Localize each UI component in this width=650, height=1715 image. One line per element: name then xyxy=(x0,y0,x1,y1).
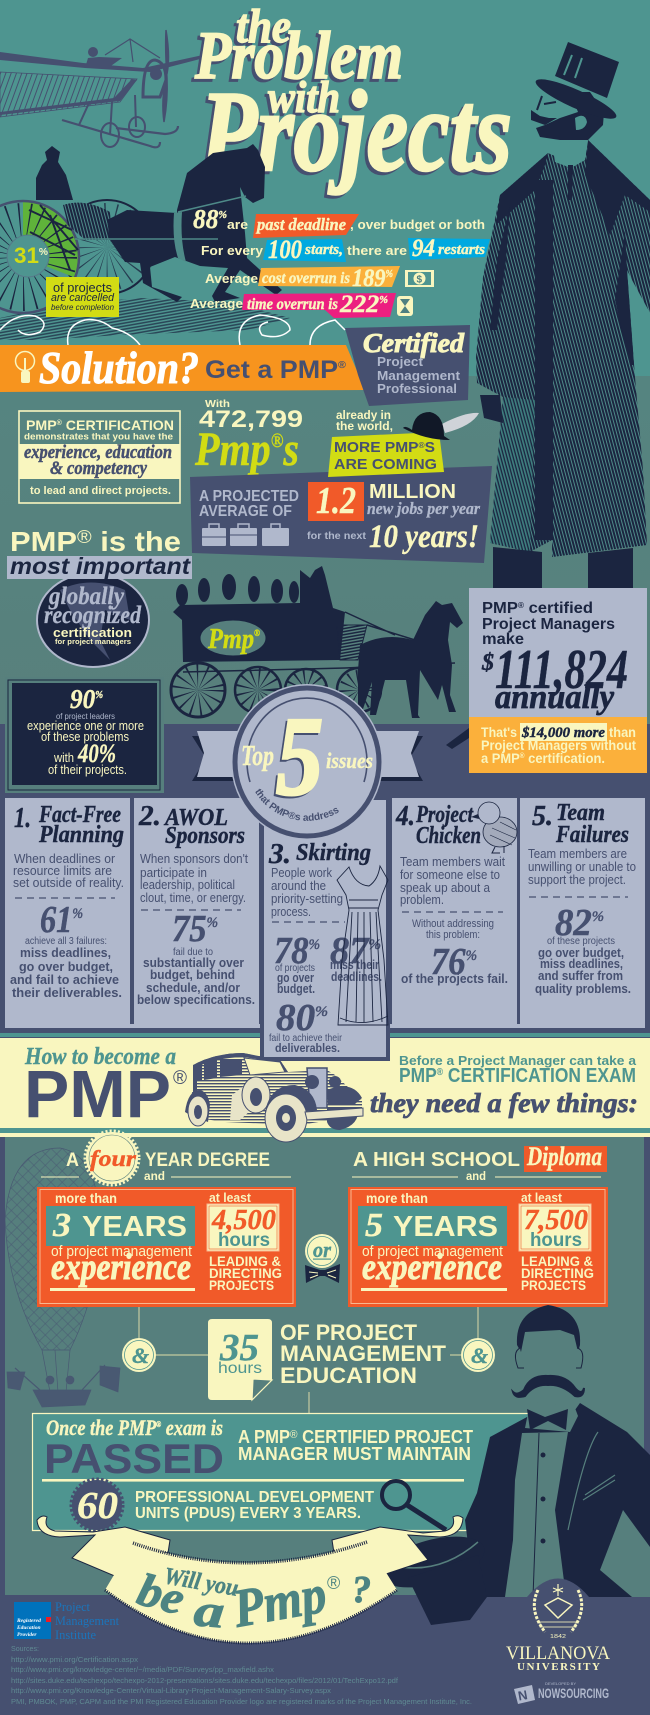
panel: issue 5 team failures: % xyxy=(592,909,604,925)
illustration: horse-drawn hearse: ® xyxy=(254,628,260,638)
logo: Villanova University seal: VILLANOVA xyxy=(506,1643,610,1664)
panel: issue 2 AWOL sponsors: schedule, and/or xyxy=(146,980,240,995)
panel: PMP certification definition: to lead and direct projects. xyxy=(30,485,171,497)
panel: issue 3 skirting: budget. xyxy=(277,981,315,996)
panel: issue 2 AWOL sponsors: clout, time, or energy. xyxy=(140,890,246,905)
badge: top 5 issues ribbon and seal: Top xyxy=(241,741,274,772)
illustration: hat under ribbon xyxy=(374,1527,490,1625)
panel: once the exam is passed: ® xyxy=(156,1420,161,1429)
illustration: dress xyxy=(337,866,388,1025)
banner: will you be a PMP ribbon: a xyxy=(192,1584,226,1638)
panel: issue 3 skirting: miss their xyxy=(330,957,379,972)
flourishes xyxy=(0,315,345,345)
panel: issue 1 fact-free planning: their deliverables. xyxy=(12,985,122,1000)
illustration: horse-drawn hearse: Pmp xyxy=(208,624,261,655)
panel: issue 2 AWOL sponsors: budget, behind xyxy=(150,967,235,982)
panel: 3 years experience path: more than xyxy=(55,1190,117,1206)
panel: salary xyxy=(469,588,647,773)
panel: once the exam is passed: Once the PMP xyxy=(46,1415,179,1440)
icon: feathered bowler hat xyxy=(403,412,479,440)
panel: issue 4 project chicken xyxy=(392,798,517,1028)
panel: projected new jobs: 1.2 xyxy=(316,480,356,522)
panel: issue 3 skirting: process. xyxy=(271,904,311,919)
panel: once the exam is passed: A PMP xyxy=(238,1427,294,1447)
requirement heading: four year degree xyxy=(41,1132,291,1184)
logo: PMI registered education provider: Education xyxy=(16,1625,41,1631)
stat: 472,799 PMPs: 472,799 xyxy=(199,406,303,433)
panel: 5 years experience path: LEADING & xyxy=(521,1253,593,1269)
panel: 5 years experience path: YEARS xyxy=(393,1211,498,1243)
callout: more PMPs are coming: MORE PMP xyxy=(334,439,416,456)
panel: issue 1 fact-free planning: miss deadlines, xyxy=(20,945,111,960)
heading: PMP is the most important: is the xyxy=(92,526,181,557)
panel: certified project management professional xyxy=(345,325,470,406)
panel: projected new jobs: MILLION xyxy=(369,481,456,503)
badge: top 5 issues ribbon and seal: 5 xyxy=(276,695,323,819)
stat: 472,799 PMPs xyxy=(194,398,393,476)
panel: PMP certification definition: experience, education xyxy=(24,442,172,463)
panel: issue 1 fact-free planning: and fail to achieve xyxy=(10,972,119,987)
badge: ampersand right xyxy=(461,1338,495,1372)
heading: PMP is the most important: ® xyxy=(77,527,92,547)
stat: 472,799 PMPs: already in xyxy=(336,408,391,422)
illustration: moustached gentleman xyxy=(465,1305,650,1597)
panel: issue 3 skirting: 3. xyxy=(268,839,291,870)
banner: how to become a PMP xyxy=(0,1038,650,1137)
heading: PMP is the most important: most important xyxy=(10,553,191,579)
logo: Villanova University seal: UNIVERSITY xyxy=(517,1661,600,1673)
stats list: are xyxy=(227,218,248,232)
panel: issue 2 AWOL sponsors: participate in xyxy=(140,865,207,880)
badge: globally recognized globe: certification xyxy=(53,625,132,640)
stats list: 100 xyxy=(268,235,302,264)
panel: once the exam is passed: MANAGER MUST MAINTAIN xyxy=(238,1444,471,1464)
title: Problem xyxy=(194,17,403,93)
logo: PMI registered education provider: Management xyxy=(55,1613,119,1628)
requirement heading: four year degree: YEAR DEGREE xyxy=(145,1150,270,1171)
panel: issue 1 fact-free planning: 61 xyxy=(40,899,78,941)
panel: 90 percent of project leaders: of their projects. xyxy=(48,762,127,777)
logo: PMI registered education provider xyxy=(14,1599,119,1642)
panel: issue 3 skirting: People work xyxy=(271,865,332,880)
requirement heading: high school diploma: Diploma xyxy=(526,1142,602,1171)
panel: issue 3 skirting: go over xyxy=(277,970,314,985)
panel: issue 3 skirting: deadlines. xyxy=(331,969,382,984)
panel: salary: Project Managers without xyxy=(481,737,636,753)
badge: globally recognized globe: globally xyxy=(48,583,125,610)
panel: once the exam is passed: ® xyxy=(290,1429,298,1441)
panel: issue 4 project chicken: for someone else to xyxy=(400,867,500,882)
solution banner: Solution? xyxy=(39,342,199,393)
panel: issue 4 project chicken: of the projects fail. xyxy=(401,971,508,986)
sources: http://www.pmi.org/Certification.aspx xyxy=(11,1655,138,1664)
stats list: restarts xyxy=(438,242,485,258)
stat: 31 percent xyxy=(7,235,119,317)
panel: issue 1 fact-free planning: Planning xyxy=(38,822,124,848)
panel: issue 3 skirting: fail to achieve their xyxy=(269,1033,343,1044)
panel: issue 4 project chicken: % xyxy=(466,948,477,964)
logo: Villanova University seal xyxy=(506,1578,610,1673)
illustration: hot air balloon xyxy=(5,1148,120,1407)
illustration: vintage car xyxy=(185,1053,363,1142)
stats list: 94 xyxy=(412,235,435,262)
panel: issue 1 fact-free planning: Fact-Free xyxy=(38,802,121,828)
sources: http://www.pmi.org/knowledge-center/~/media/PDF/Surveys/pp_maxfield.ashx xyxy=(11,1665,274,1674)
solution banner xyxy=(0,342,365,393)
panel: issue 4 project chicken: Team members wait xyxy=(400,854,505,869)
panel: issue 4 project chicken: 76 xyxy=(431,941,469,983)
panel: issue 5 team failures xyxy=(520,798,645,1028)
panel: issue 1 fact-free planning xyxy=(5,798,130,1028)
badge: ampersand right: & xyxy=(471,1343,488,1368)
panel: salary: PMP xyxy=(482,600,517,617)
banner: how to become a PMP: Before a Project Manager can take a xyxy=(399,1053,637,1068)
panel: certified project management professional: Management xyxy=(377,368,461,383)
icon: hourglass xyxy=(397,296,413,316)
requirement heading: high school diploma: A HIGH SCHOOL xyxy=(353,1149,520,1171)
logo: NowSourcing xyxy=(514,1682,609,1704)
stat: 472,799 PMPs: Pmp xyxy=(195,423,286,476)
banner: will you be a PMP ribbon xyxy=(37,1516,463,1643)
heading: PMP is the most important: PMP xyxy=(10,526,71,557)
panel: 3 years experience path: DIRECTING xyxy=(209,1265,282,1281)
panel: once the exam is passed: CERTIFIED PROJECT xyxy=(298,1427,473,1447)
panel: salary: than xyxy=(609,724,636,740)
banner: how to become a PMP: PMP xyxy=(399,1065,442,1087)
title: with xyxy=(268,73,340,122)
panel: salary: ® xyxy=(520,752,525,760)
panel: issue 3 skirting: deliverables. xyxy=(275,1041,340,1055)
panel: issue 4 project chicken: Project xyxy=(415,802,474,828)
note: 35 hours of project management education: hours xyxy=(218,1360,262,1377)
stats list: % xyxy=(379,295,388,306)
requirement heading: four year degree: four xyxy=(90,1146,137,1171)
panel: 5 years experience path: at least xyxy=(521,1190,563,1205)
badge: top 5 issues ribbon and seal xyxy=(192,684,423,838)
illustration: horse and carriage xyxy=(0,144,282,313)
panel: salary: certified xyxy=(524,600,593,617)
logo: PMI registered education provider: Project xyxy=(55,1599,90,1614)
panel: salary: a PMP xyxy=(481,750,523,766)
callout: more PMPs are coming: S xyxy=(425,439,435,456)
panel: 3 years experience path xyxy=(37,1187,296,1307)
sources: Sources: xyxy=(11,1644,39,1653)
logo: PMI registered education provider: Provider xyxy=(17,1632,37,1638)
logo: Villanova University seal: 1842 xyxy=(550,1634,566,1640)
panel: 90 percent of project leaders: 90 xyxy=(70,684,97,714)
illustration: magnifying glass xyxy=(382,1481,446,1530)
panel: certified project management professional: Project xyxy=(377,354,424,369)
stats list: 222 xyxy=(340,291,378,318)
banner: will you be a PMP ribbon: ® xyxy=(327,1573,340,1593)
panel: salary: certification. xyxy=(525,750,605,766)
panel: issue 2 AWOL sponsors: 2. xyxy=(138,801,161,832)
panel: issue 1 fact-free planning: 1. xyxy=(14,803,31,834)
stat: 31 percent: 31 xyxy=(14,243,38,268)
panel: 5 years experience path: PROJECTS xyxy=(521,1277,586,1293)
logo: NowSourcing: DEVELOPED BY xyxy=(545,1682,577,1686)
panel: 3 years experience path: 4,500 xyxy=(211,1205,276,1236)
sources: PMI, PMBOK, PMP, CAPM and the PMI Registered Education Provider logo are registered marks of the Project Management Institute, Inc. xyxy=(11,1697,472,1706)
solution banner: Get a PMP xyxy=(205,356,329,384)
logo: PMI registered education provider: Institute xyxy=(55,1627,96,1642)
panel: 5 years experience path xyxy=(348,1187,608,1307)
illustration: ground texture xyxy=(0,298,290,340)
panel: issue 1 fact-free planning: When deadlines or xyxy=(14,851,116,866)
logo: NowSourcing: NOWSOURCING xyxy=(538,1685,609,1701)
stat: 31 percent: are cancelled xyxy=(51,292,115,304)
requirement heading: four year degree: and xyxy=(144,1169,165,1183)
panel: issue 1 fact-free planning: go over budget, xyxy=(19,959,113,974)
panel: 5 years experience path: more than xyxy=(366,1190,428,1206)
requirement heading: high school diploma: and xyxy=(466,1169,486,1183)
stats list: time overrun is xyxy=(247,296,338,313)
sources: http://sites.duke.edu/techexpo/techexpo-2012-presentations/sites.duke.edu/techexpo/files/2012/01/TechExpo12.pdf xyxy=(11,1676,399,1685)
stats list: % xyxy=(386,269,393,280)
panel: projected new jobs: new jobs per year xyxy=(367,499,480,518)
badge: globally recognized globe: recognized xyxy=(44,602,141,629)
stats list: past deadline xyxy=(255,215,346,234)
panel: 3 years experience path: 3 xyxy=(52,1207,71,1244)
panel: 90 percent of project leaders: with xyxy=(53,750,74,765)
panel: issue 3 skirting: % xyxy=(315,1004,328,1020)
panel: issue 2 AWOL sponsors: Sponsors xyxy=(165,823,245,849)
stat: 31 percent: before completion xyxy=(51,302,114,312)
panel: 90 percent of project leaders: of project leaders xyxy=(56,711,115,721)
panel: 5 years experience path: hours xyxy=(530,1230,582,1251)
panel: once the exam is passed: exam is xyxy=(161,1415,223,1440)
panel: projected new jobs xyxy=(190,466,492,563)
panel: salary: make xyxy=(482,631,524,648)
panel: 5 years experience path: experience xyxy=(362,1247,502,1288)
callout: more PMPs are coming: ® xyxy=(419,441,425,450)
panel: once the exam is passed xyxy=(32,1414,530,1530)
stat: 31 percent: % xyxy=(39,247,48,258)
icon: dollar bill: $ xyxy=(416,274,422,286)
badge: globally recognized globe: for project managers xyxy=(55,637,131,646)
panel: issue 4 project chicken: Without addressing xyxy=(412,918,494,930)
note: 35 hours of project management education: OF PROJECT xyxy=(280,1320,418,1345)
panel: 3 years experience path: experience xyxy=(51,1247,191,1288)
panel: issue 3 skirting: of projects xyxy=(275,963,315,974)
panel: certified project management professional: Professional xyxy=(377,381,457,396)
panel: salary: $ xyxy=(481,650,494,676)
requirement heading: four year degree: A xyxy=(66,1150,79,1171)
panel: PMP certification definition xyxy=(19,411,180,503)
banner: will you be a PMP ribbon: ? xyxy=(352,1569,371,1611)
panel: issue 3 skirting: 78 xyxy=(274,930,312,972)
panel: 3 years experience path: LEADING & xyxy=(209,1253,281,1269)
callout: more PMPs are coming: ARE COMING xyxy=(334,456,437,473)
icon: chick xyxy=(471,802,517,853)
panel: 3 years experience path: PROJECTS xyxy=(209,1277,274,1293)
icons: briefcases xyxy=(202,524,289,546)
note: 35 hours of project management education: EDUCATION xyxy=(280,1363,417,1388)
badge: top 5 issues ribbon and seal: that PMP®s address xyxy=(256,788,339,821)
title: the xyxy=(236,0,291,53)
solution banner: ® xyxy=(338,360,347,371)
panel: issue 2 AWOL sponsors xyxy=(134,798,259,1028)
icon: dollar bill xyxy=(405,270,434,287)
panel: issue 3 skirting: 87 xyxy=(330,930,368,972)
note: 35 hours of project management education xyxy=(208,1319,447,1400)
panel: projected new jobs: for the next xyxy=(307,530,367,542)
panel: issue 3 skirting: priority-setting xyxy=(271,891,343,906)
badge: or with bow tie: or xyxy=(313,1237,331,1262)
panel: issue 5 team failures: Team members are xyxy=(528,846,627,861)
panel: issue 3 skirting: Skirting xyxy=(296,840,371,866)
badge: ampersand left xyxy=(122,1338,156,1372)
banner: will you be a PMP ribbon: be xyxy=(132,1563,190,1625)
panel: issue 5 team failures: of these projects xyxy=(547,936,615,947)
panel: projected new jobs: A PROJECTED xyxy=(199,488,299,505)
panel: issue 4 project chicken: Chicken xyxy=(416,823,481,849)
illustration: biplane xyxy=(0,30,204,147)
panel: issue 3 skirting xyxy=(262,798,388,1059)
panel: once the exam is passed: UNITS (PDUS) EVERY 3 YEARS. xyxy=(135,1505,361,1522)
panel: certified project management professional: Certified xyxy=(363,328,465,358)
stats list: Average xyxy=(190,296,243,311)
panel: 90 percent of project leaders: experience one or more xyxy=(27,718,144,733)
panel: once the exam is passed: PASSED xyxy=(44,1435,224,1482)
sources: http://www.pmi.org/Knowledge-Center/Virtual-Library-Project-Management-Salary-Survey.aspx xyxy=(11,1686,331,1695)
stat: 472,799 PMPs: the world, xyxy=(336,419,393,433)
panel: PMP certification definition: & competency xyxy=(50,458,147,479)
panel: issue 4 project chicken: speak up about a xyxy=(400,880,491,895)
panel: 5 years experience path: of project management xyxy=(362,1243,504,1260)
stat: 472,799 PMPs: ® xyxy=(271,430,283,452)
panel: 90 percent of project leaders: of these problems xyxy=(41,729,129,744)
panel: PMP certification definition: ® xyxy=(57,419,63,427)
panel: issue 5 team failures: quality problems. xyxy=(535,981,631,996)
stats list: 88 xyxy=(193,204,220,234)
sources xyxy=(11,1644,472,1706)
panel: issue 5 team failures: go over budget, xyxy=(538,945,624,960)
stats list: there are xyxy=(347,243,407,258)
panel: issue 2 AWOL sponsors: When sponsors don't xyxy=(140,851,248,866)
stats list: Average xyxy=(205,271,258,286)
stat: 31 percent: of projects xyxy=(53,281,112,295)
callout: more PMPs are coming xyxy=(328,432,444,477)
panel: issue 3 skirting: % xyxy=(309,937,320,953)
panel: issue 2 AWOL sponsors: below specifications. xyxy=(137,992,255,1007)
stats list xyxy=(190,204,490,318)
panel: issue 4 project chicken: this problem: xyxy=(426,929,480,941)
note: 35 hours of project management education: 35 xyxy=(219,1327,259,1369)
panel: issue 1 fact-free planning: resource limits are xyxy=(13,863,112,878)
panel: issue 5 team failures: Team xyxy=(556,800,605,826)
panel: 3 years experience path: at least xyxy=(209,1190,252,1205)
logo: NowSourcing: N xyxy=(517,1687,529,1704)
panel: salary: That's xyxy=(481,724,517,740)
panel: PMP certification definition: demonstrates that you have the xyxy=(24,432,173,442)
badge: globally recognized globe xyxy=(37,573,149,667)
stats list: cost overrun is xyxy=(262,270,350,287)
requirement heading: high school diploma xyxy=(352,1142,607,1183)
banner: how to become a PMP: they need a few things: xyxy=(370,1088,638,1118)
panel: issue 4 project chicken: 4. xyxy=(395,801,415,832)
stats list: 189 xyxy=(352,265,390,292)
panel: issue 3 skirting: % xyxy=(368,937,381,953)
note: 35 hours of project management education: MANAGEMENT xyxy=(280,1341,447,1366)
panel: salary: ® xyxy=(518,601,524,610)
illustration: top hat gentleman xyxy=(476,42,650,588)
stat: 472,799 PMPs: s xyxy=(283,423,299,476)
panel: PMP certification definition: CERTIFICATION xyxy=(62,417,174,433)
panel: 90 percent of project leaders: % xyxy=(95,690,103,701)
panel: issue 2 AWOL sponsors: % xyxy=(207,915,218,931)
panel: issue 5 team failures: miss deadlines, xyxy=(540,956,623,971)
panel: issue 1 fact-free planning: % xyxy=(72,906,83,922)
stats list: % xyxy=(218,209,227,221)
panel: 5 years experience path: 5 xyxy=(365,1207,383,1244)
panel: issue 1 fact-free planning: achieve all 3 failures: xyxy=(25,936,107,947)
panel: projected new jobs: AVERAGE OF xyxy=(199,503,292,520)
panel: 90 percent of project leaders: 40% xyxy=(77,739,116,768)
panel: issue 5 team failures: Failures xyxy=(555,822,629,848)
badge: top 5 issues ribbon and seal: issues xyxy=(326,748,373,773)
panel: once the exam is passed: PROFESSIONAL DEVELOPMENT xyxy=(135,1489,374,1506)
panel: issue 2 AWOL sponsors: leadership, political xyxy=(140,877,235,892)
panel: issue 5 team failures: and suffer from xyxy=(538,968,623,983)
panel: 3 years experience path: hours xyxy=(218,1230,270,1251)
badge: ampersand left: & xyxy=(132,1343,149,1368)
panel: salary: Project Managers xyxy=(482,616,615,633)
panel: issue 2 AWOL sponsors: fail due to xyxy=(173,947,213,958)
panel: salary: annually xyxy=(495,679,615,716)
panel: issue 5 team failures: 5. xyxy=(532,801,553,832)
panel: issue 2 AWOL sponsors: 75 xyxy=(172,908,210,950)
panel: 5 years experience path: 7,500 xyxy=(524,1205,588,1236)
panel: 3 years experience path: YEARS xyxy=(82,1211,187,1243)
banner: how to become a PMP: PMP xyxy=(24,1057,171,1132)
stats list: , over budget or both xyxy=(350,218,485,232)
heading: PMP is the most important xyxy=(7,526,192,579)
stat: 472,799 PMPs: With xyxy=(205,398,230,410)
panel: issue 5 team failures: support the project. xyxy=(528,872,626,887)
stats list: For every xyxy=(201,243,264,258)
title xyxy=(194,0,512,196)
badge: or with bow tie xyxy=(305,1234,340,1283)
title: Projects xyxy=(199,68,512,196)
panel: issue 4 project chicken: problem. xyxy=(400,892,444,907)
banner: will you be a PMP ribbon: Will you xyxy=(162,1563,240,1602)
logo: PMI registered education provider: Registered xyxy=(16,1618,41,1624)
panel: salary: $14,000 more xyxy=(521,725,605,741)
panel: issue 5 team failures: 82 xyxy=(555,902,593,944)
panel: 3 years experience path: of project management xyxy=(51,1243,193,1260)
panel: PMP certification definition: PMP xyxy=(26,417,56,433)
banner: how to become a PMP: How to become a xyxy=(24,1044,176,1070)
connectors xyxy=(139,1307,478,1413)
banner: how to become a PMP: ® xyxy=(437,1067,444,1078)
panel: 90 percent of project leaders xyxy=(5,677,164,793)
panel: issue 2 AWOL sponsors: substantially over xyxy=(143,955,244,970)
panel: issue 5 team failures: unwilling or unable to xyxy=(528,859,636,874)
illustration: horse-drawn hearse xyxy=(171,566,469,749)
stats list: starts, xyxy=(304,242,343,258)
banner: how to become a PMP: ® xyxy=(173,1068,187,1089)
panel: projected new jobs: 10 years! xyxy=(369,519,479,555)
panel: issue 3 skirting: 80 xyxy=(276,997,314,1039)
panel: 5 years experience path: DIRECTING xyxy=(521,1265,594,1281)
banner: will you be a PMP ribbon: Pmp xyxy=(228,1564,331,1639)
panel: issue 3 skirting: around the xyxy=(271,878,326,893)
panel: once the exam is passed: 60 xyxy=(77,1485,118,1527)
panel: issue 1 fact-free planning: set outside of reality. xyxy=(13,875,124,890)
panel: issue 2 AWOL sponsors: AWOL xyxy=(163,805,228,831)
